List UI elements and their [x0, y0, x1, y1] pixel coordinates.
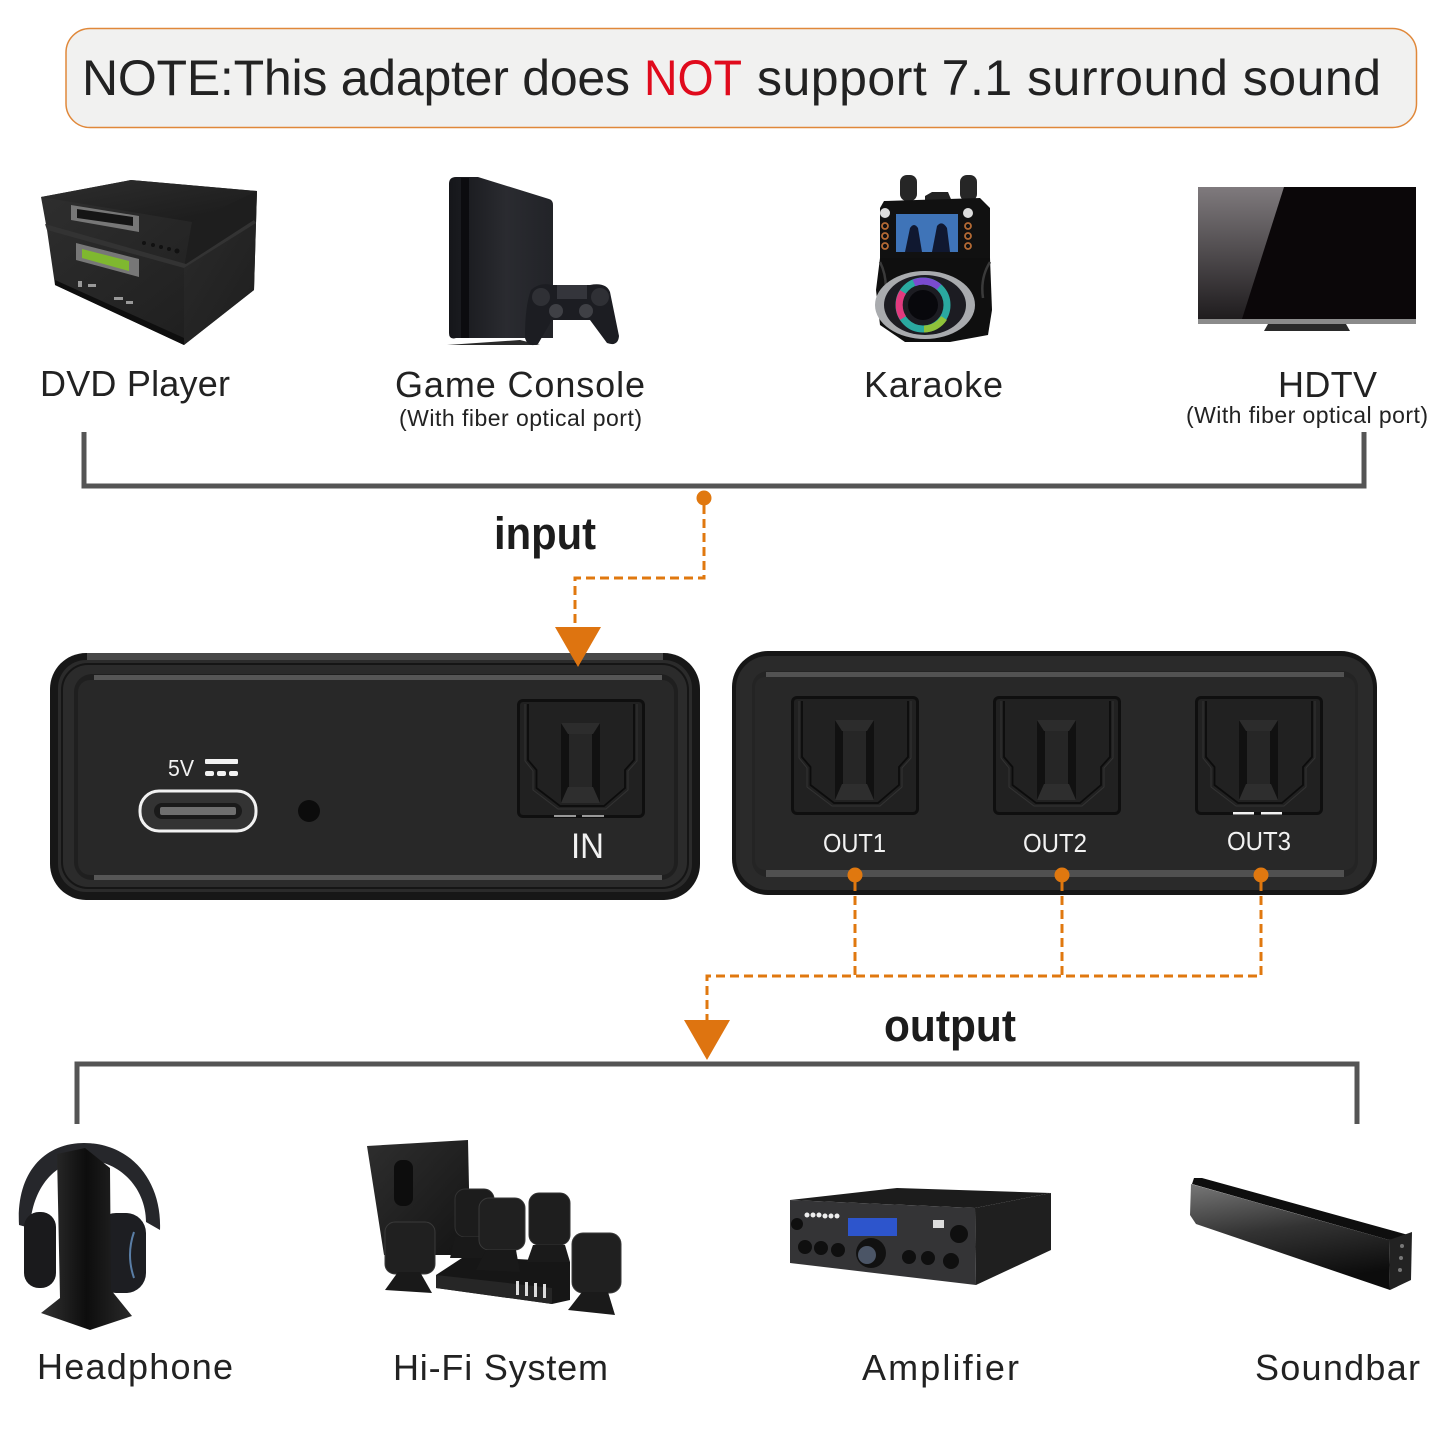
label: OUT2: OUT2	[1023, 828, 1087, 858]
label: OUT1: OUT1	[823, 828, 886, 858]
icon: soundbar	[1190, 1178, 1412, 1290]
power label	[168, 755, 238, 781]
input bracket	[84, 432, 1364, 486]
optical port OUT1	[791, 696, 919, 815]
icon: karaoke machine	[875, 175, 992, 342]
power label: 5V	[168, 755, 195, 781]
icon: HDTV	[1198, 187, 1416, 331]
icon: hi-fi speaker system	[367, 1140, 621, 1315]
device: output side panel	[732, 651, 1377, 895]
label: Soundbar: Soundbar	[1255, 1347, 1420, 1388]
label: output: output	[884, 1000, 1016, 1051]
label: IN: IN	[571, 827, 604, 866]
label: HDTV: HDTV	[1278, 364, 1377, 405]
label: Game Console	[395, 364, 645, 431]
arrow: output connectors	[684, 868, 1268, 1060]
label: Game Console: Game Console	[395, 364, 645, 405]
note banner: support 7.1 surround sound	[757, 50, 1381, 106]
note banner	[66, 28, 1416, 128]
icon: game console with controller	[447, 177, 619, 345]
optical port OUT3	[1195, 696, 1323, 815]
indicator hole	[298, 800, 320, 822]
label: Karaoke: Karaoke	[864, 364, 1003, 405]
label: HDTV: (With fiber optical port)	[1186, 402, 1428, 428]
label: DVD Player: DVD Player	[40, 363, 230, 404]
note banner: NOT	[644, 50, 742, 106]
label: input: input	[494, 508, 596, 559]
note banner: NOTE:This adapter does	[82, 50, 630, 106]
optical IN port	[517, 699, 645, 818]
icon: DVD player stack	[41, 180, 257, 345]
optical port OUT2	[993, 696, 1121, 815]
icon: amplifier	[790, 1188, 1051, 1285]
label: HDTV	[1186, 364, 1428, 428]
label: Hi-Fi System: Hi-Fi System	[393, 1347, 608, 1388]
label: Game Console: (With fiber optical port)	[399, 405, 642, 431]
label: OUT3: OUT3	[1227, 826, 1291, 856]
icon: headphones on stand	[19, 1143, 160, 1330]
device: input side panel	[50, 653, 700, 900]
output bracket	[77, 1064, 1357, 1124]
label: Amplifier: Amplifier	[862, 1347, 1019, 1388]
arrow: input connector	[555, 490, 712, 667]
label: Headphone: Headphone	[37, 1346, 233, 1387]
USB-C port	[140, 791, 256, 831]
